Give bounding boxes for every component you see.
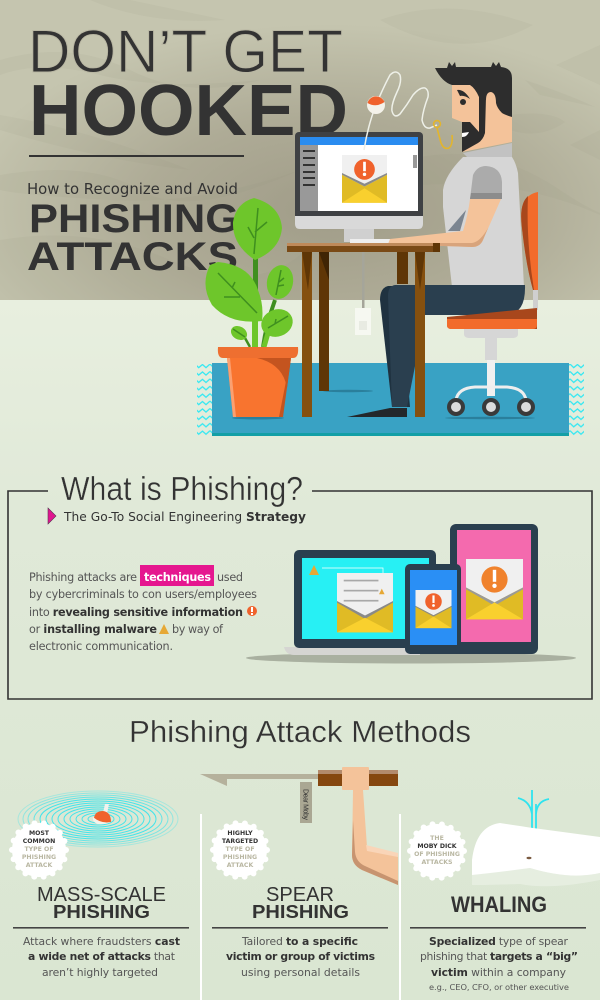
man: pants [380,285,525,407]
power cord and outlet [355,252,371,335]
man: shoe [347,408,407,417]
title: Don't Get Hooked: DON’T GET [28,18,343,85]
icon: bobber in ripples [18,791,178,847]
desk rear [302,252,408,417]
icon: laptop email [337,573,393,632]
body text: techniques [144,571,211,584]
icon: monitor email alert [342,155,387,203]
title: Don't Get Hooked [28,18,348,151]
badge: most common [12,823,66,877]
plant: pot [218,347,298,417]
tablet [450,524,538,654]
icon: spear and arm [200,767,398,885]
spear handle and hand [318,767,398,790]
icon: hook [434,121,452,148]
heading: what is phishing: What is Phishing? [61,470,303,507]
body text: Phishing attacks are [29,571,137,584]
arm [352,790,398,885]
fishing line and bobber [364,72,437,150]
badge: moby dick: ATTACKS [422,859,452,866]
badge: highly targeted: HIGHLY [227,830,253,837]
title divider [29,155,244,157]
shadow [246,652,576,664]
plant: veins [218,208,288,337]
badge: most common: COMMON [23,838,55,845]
badge: most common: TYPE OF [24,846,54,853]
column: mass-scale phishing: a wide net of attacks that [28,950,175,963]
badge: highly targeted: TYPE OF [225,846,255,853]
laptop [284,550,436,655]
rug [197,363,584,436]
monitor [295,132,423,243]
column: mass-scale phishing: Attack where fraudsters cast [23,935,180,948]
badge: moby dick: THE [430,835,444,842]
column dividers [200,814,401,1000]
badge: moby dick [410,824,464,878]
man: chair back [521,192,538,310]
column: mass-scale phishing: aren’t highly targeted [42,966,158,979]
highlight: techniques [140,565,214,586]
body text: electronic communication. [29,640,173,653]
column: whaling: Specialized type of spear [429,935,569,948]
column: spear phishing: SPEAR [266,883,334,906]
column: mass-scale phishing: PHISHING [53,901,150,922]
icon: phone email [416,590,452,628]
devices illustration [246,524,576,664]
plant: leaves [205,198,297,343]
badge: highly targeted: PHISHING [223,854,257,861]
icon: inline alert [247,606,257,616]
body text: used [217,571,243,584]
title: Don't Get Hooked: HOOKED [29,71,348,151]
man: mouth [462,132,469,137]
icon: tablet email [466,559,523,619]
subtitle: How to Recognize and Avoid [27,180,238,198]
background wall [0,0,600,300]
body text [29,565,257,653]
tag: Dear Moby [300,782,312,823]
desk front [287,243,440,417]
column: spear phishing: victim or group of victims [226,950,375,963]
man: chair seat and base [447,308,537,416]
man illustration [347,62,538,417]
body text: by way of [172,623,224,636]
badge: highly targeted: ATTACK [227,862,253,869]
column: mass-scale phishing [13,883,189,979]
column: whaling: WHALING [451,892,547,917]
plant: stems [245,258,275,347]
man: beard [462,97,486,152]
badge: most common: PHISHING [22,854,56,861]
man: shirt [443,143,524,287]
man: hair [435,62,512,117]
column: whaling: victim within a company [431,966,567,979]
tag: Dear Moby: Dear Moby [302,789,308,820]
background floor [0,300,600,1000]
body text: into revealing sensitive information [29,606,243,619]
subheading: The Go-To Social Engineering Strategy [63,510,306,524]
badge: moby dick: OF PHISHING [414,851,460,858]
column: spear phishing: using personal details [241,966,360,979]
body text: by cybercriminals to con users/employees [29,588,257,601]
heading: phishing attack methods: Phishing Attack Methods [129,714,471,749]
body text: or installing malware [29,623,157,636]
icon: inline warning [159,624,169,634]
column: whaling [410,892,586,992]
column: spear phishing: PHISHING [252,901,349,922]
icon: pink arrow [48,508,56,524]
man: neck and face [452,85,512,152]
badge: highly targeted: TARGETED [222,838,258,845]
panel: what is phishing [8,470,592,699]
man: arm [388,199,501,247]
column: spear phishing [212,883,388,979]
badge: most common: MOST [29,830,50,837]
subtitle: ATTACKS [27,235,238,279]
man: eye and brow [457,90,470,105]
phone [405,564,461,654]
icon: whale [472,790,600,886]
column: whaling: phishing that targets a “big” [420,950,578,963]
subtitle [27,180,239,279]
man: sleeve [470,166,502,199]
column: spear phishing: Tailored to a specific [241,935,358,948]
badge: moby dick: MOBY DICK [417,843,457,850]
badge: most common: ATTACK [26,862,52,869]
subtitle: PHISHING [29,197,239,241]
badge: highly targeted [213,823,267,877]
column: mass-scale phishing: MASS-SCALE [37,883,166,906]
plant [205,198,298,417]
column: whaling: e.g., CEO, CFO, or other executive [429,982,569,992]
